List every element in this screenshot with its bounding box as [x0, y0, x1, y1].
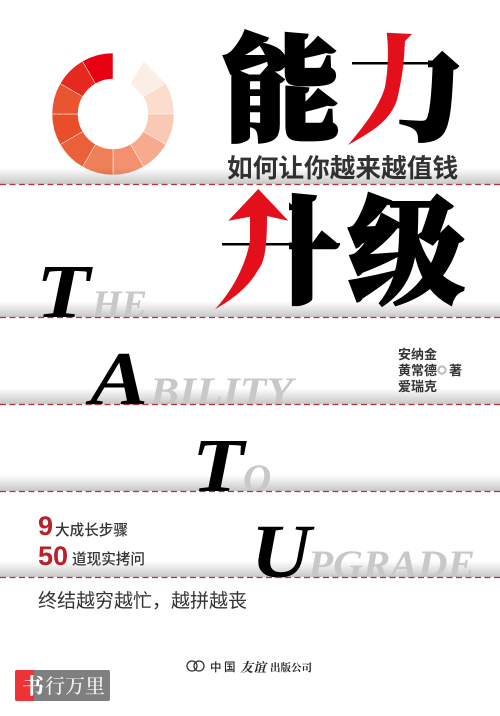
authors: 著	[449, 363, 462, 378]
selling point: 50 questions: 道现实拷问	[72, 550, 145, 568]
tagline word: The: HE	[91, 283, 147, 326]
slogan: 终结越穷越忙，越拼越丧	[38, 590, 247, 612]
subtitle: 如何让你越来越值钱	[227, 154, 458, 183]
publisher: 中国	[210, 660, 238, 674]
tagline word: Upgrade: PGRADE	[307, 543, 475, 586]
icon: publisher logo	[187, 661, 204, 671]
tagline word: Ability	[85, 337, 297, 421]
icon: red stroke of 力	[348, 33, 412, 145]
title: 升级: 升	[224, 160, 340, 327]
authors: 爱瑞克	[398, 379, 437, 394]
tagline word: Upgrade	[251, 510, 475, 594]
tagline word: To: O	[243, 457, 271, 500]
title: 能力	[223, 0, 465, 165]
publisher	[187, 657, 312, 676]
authors: 安纳金	[398, 347, 437, 362]
tagline word: Ability: A	[85, 337, 148, 421]
tagline word: The	[36, 250, 147, 334]
watermark badge: 行万里	[45, 670, 105, 699]
title: 能力: 能	[223, 0, 339, 165]
selling point: 50 questions: 50	[38, 541, 68, 571]
icon: red upward arrow	[215, 189, 288, 309]
selling point: 9 steps: 9	[38, 511, 53, 541]
title: 能力: 力	[349, 0, 465, 165]
selling point: 50 questions	[38, 541, 145, 571]
title: 升级: 级	[348, 160, 464, 327]
selling point: 9 steps: 大成长步骤	[55, 522, 128, 539]
watermark badge	[15, 670, 110, 701]
tagline word: To	[192, 424, 271, 508]
selling point: 9 steps	[38, 511, 128, 541]
icon: segmented progress ring	[52, 53, 174, 175]
publisher: 友谊	[240, 657, 268, 676]
tagline word: Upgrade: U	[251, 510, 315, 594]
authors: 黄常德	[398, 363, 437, 378]
title: 升级	[215, 160, 464, 327]
tagline word: The: T	[36, 250, 93, 334]
tagline word: Ability: BILITY	[149, 370, 297, 413]
publisher: 出版公司	[270, 660, 312, 675]
authors	[398, 347, 462, 394]
tagline word: To: T	[192, 424, 247, 508]
watermark badge: 书	[22, 670, 45, 701]
